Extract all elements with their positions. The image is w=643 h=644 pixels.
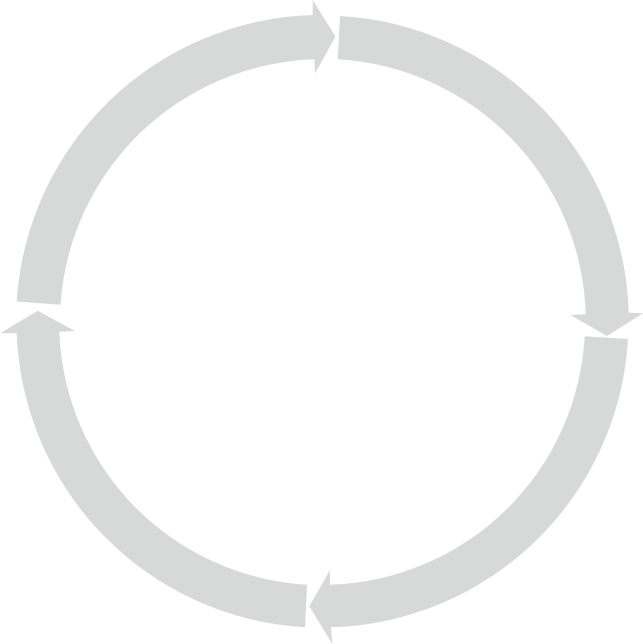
arrow: top to right [338,16,643,336]
arrow: left to top [17,0,335,305]
arrow: right to bottom [309,336,628,644]
arrow: bottom to left [0,311,307,627]
